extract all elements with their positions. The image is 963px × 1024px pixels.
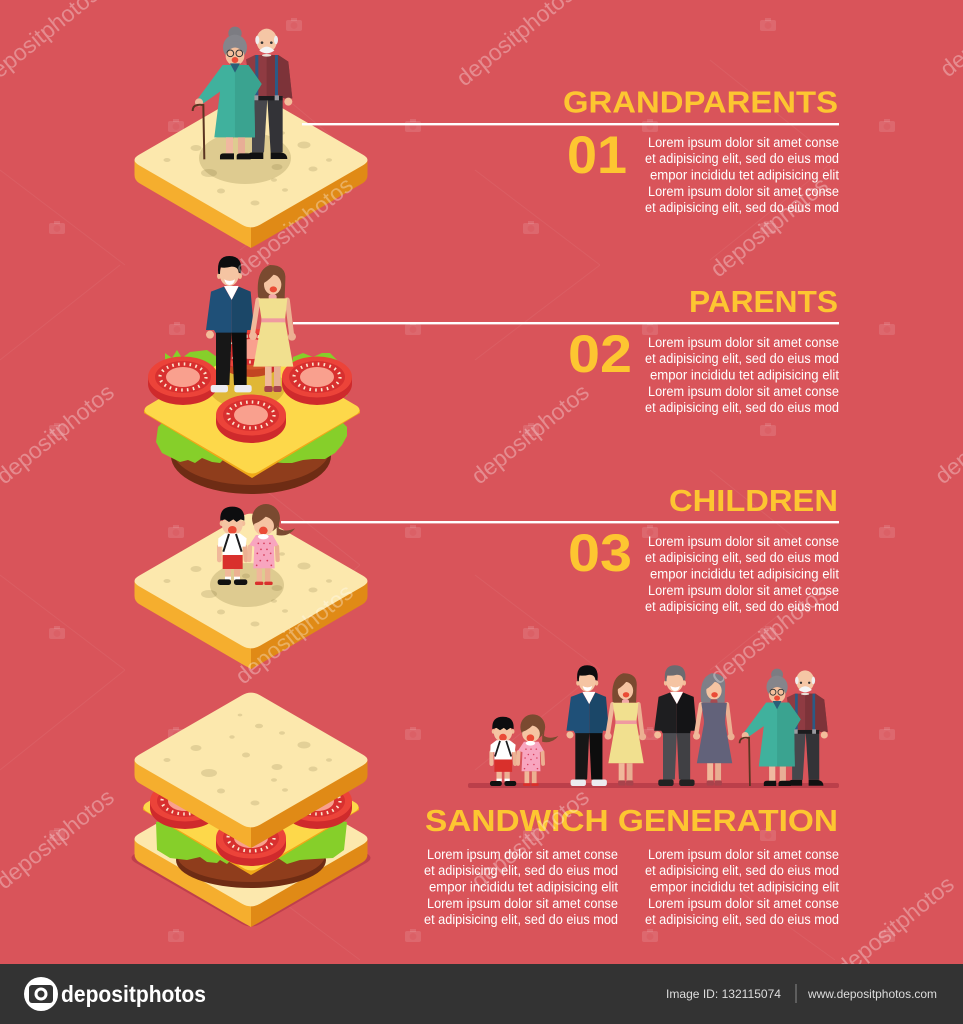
left tomato: [150, 780, 220, 829]
top bread pores: [164, 714, 332, 806]
connector line 2: [293, 322, 839, 324]
figures: grandparents: [193, 27, 292, 159]
footer logo text: depositphotos: [61, 981, 206, 1007]
mother: [249, 265, 296, 392]
footer logo icon: [24, 977, 58, 1011]
cheese: [144, 346, 360, 478]
boy: [490, 717, 516, 786]
text block left: Lorem ipsum dolor sit amet conse: [427, 847, 618, 862]
father: [206, 256, 254, 392]
bread slice: [134, 93, 368, 248]
girl: [518, 714, 558, 786]
watermarks: depositphotos: [466, 784, 594, 894]
heading: parents: PARENTS: [689, 284, 838, 319]
figure shadow: [199, 132, 291, 184]
grandmother: [740, 669, 801, 786]
text block left: et adipisicing elit, sed do eius mod: [424, 863, 618, 878]
number 02: 02: [568, 325, 632, 384]
text block 3: empor incididu tet adipisicing elit: [650, 566, 839, 582]
watermarks: depositphotos: [705, 579, 833, 689]
heading: children: CHILDREN: [669, 483, 838, 518]
front tomato: [216, 394, 286, 443]
text block right: empor incididu tet adipisicing elit: [650, 880, 839, 894]
text block left: et adipisicing elit, sed do eius mod: [424, 912, 618, 927]
bottom bread: [134, 772, 368, 927]
text block left: Lorem ipsum dolor sit amet conse: [427, 896, 618, 911]
panel: children bread slice: [134, 514, 368, 669]
patty: [176, 828, 326, 888]
text block 1: Lorem ipsum dolor sit amet conse: [648, 135, 839, 150]
connector line 3: [281, 521, 839, 523]
watermarks: depositphotos: [230, 172, 358, 282]
boy: [218, 507, 247, 585]
bread pores: [164, 535, 332, 626]
text block right: et adipisicing elit, sed do eius mod: [645, 863, 839, 878]
text block right: Lorem ipsum dolor sit amet conse: [648, 896, 839, 911]
text block right: [645, 847, 839, 927]
patty: [171, 413, 331, 494]
text block right: Lorem ipsum dolor sit amet conse: [648, 847, 839, 862]
text block 3: et adipisicing elit, sed do eius mod: [645, 599, 839, 614]
figures: parents: [206, 256, 296, 392]
figure shadow: [209, 365, 285, 409]
text block left: [424, 847, 618, 927]
text block left: empor incididu tet adipisicing elit: [429, 880, 618, 894]
text block 2: Lorem ipsum dolor sit amet conse: [648, 384, 839, 399]
text block right: et adipisicing elit, sed do eius mod: [645, 912, 839, 927]
footer divider: [796, 984, 797, 1003]
text block 1: et adipisicing elit, sed do eius mod: [645, 200, 839, 215]
cheese: [143, 744, 359, 875]
lettuce: [156, 350, 347, 463]
middle-aged man: [654, 665, 697, 786]
watermarks: depositphotos: [831, 871, 959, 981]
watermark camera marks: [49, 18, 895, 942]
father: [566, 665, 609, 786]
middle-aged woman: [693, 673, 735, 786]
number 01: 01: [567, 126, 627, 185]
grandfather: [246, 29, 292, 159]
text block 2: et adipisicing elit, sed do eius mod: [645, 400, 839, 415]
watermarks: depositphotos: [466, 379, 594, 489]
text block 3: [645, 534, 839, 614]
bread pores: [164, 114, 332, 206]
girl: [249, 504, 295, 585]
text block 1: Lorem ipsum dolor sit amet conse: [648, 184, 839, 199]
right tomato: [282, 780, 352, 829]
sandwich shadow: [132, 790, 370, 926]
panel: parents sandwich filling: [144, 328, 360, 494]
back tomato: [216, 328, 286, 377]
watermarks: depositphotos: [705, 172, 833, 282]
website: www.depositphotos.com: [807, 987, 937, 1001]
heading: grandparents: GRANDPARENTS: [563, 84, 838, 120]
text block 2: [645, 335, 839, 415]
grandmother: [193, 27, 262, 159]
figure shadow: [210, 563, 284, 607]
right tomato: [282, 356, 352, 405]
number 03: 03: [568, 524, 632, 583]
text block 3: et adipisicing elit, sed do eius mod: [645, 550, 839, 565]
text block 1: [645, 135, 839, 215]
left tomato: [148, 356, 218, 405]
watermarks: depositphotos: [230, 579, 358, 689]
text block 1: empor incididu tet adipisicing elit: [650, 168, 839, 182]
panel: complete sandwich: [132, 693, 370, 927]
figures: children: [218, 504, 295, 585]
mother: [605, 673, 646, 786]
lettuce: [156, 815, 347, 864]
footer bar: [0, 964, 963, 1024]
grandfather: [787, 670, 828, 786]
text block 2: et adipisicing elit, sed do eius mod: [645, 351, 839, 366]
front tomato: [216, 818, 286, 866]
connector line 1: [302, 123, 839, 125]
top bread: [134, 693, 368, 848]
panel: grandparents bread slice: [134, 93, 368, 248]
image id: Image ID: 132115074: [666, 987, 781, 1001]
text block 2: Lorem ipsum dolor sit amet conse: [648, 335, 839, 350]
text block 2: empor incididu tet adipisicing elit: [650, 368, 839, 382]
text block 3: Lorem ipsum dolor sit amet conse: [648, 583, 839, 598]
text block 1: et adipisicing elit, sed do eius mod: [645, 151, 839, 166]
text block 3: Lorem ipsum dolor sit amet conse: [648, 534, 839, 549]
heading: sandwich generation: SANDWICH GENERATION: [425, 803, 838, 838]
bread slice: [134, 514, 368, 669]
ground line: [468, 783, 839, 788]
family row: [468, 665, 839, 788]
